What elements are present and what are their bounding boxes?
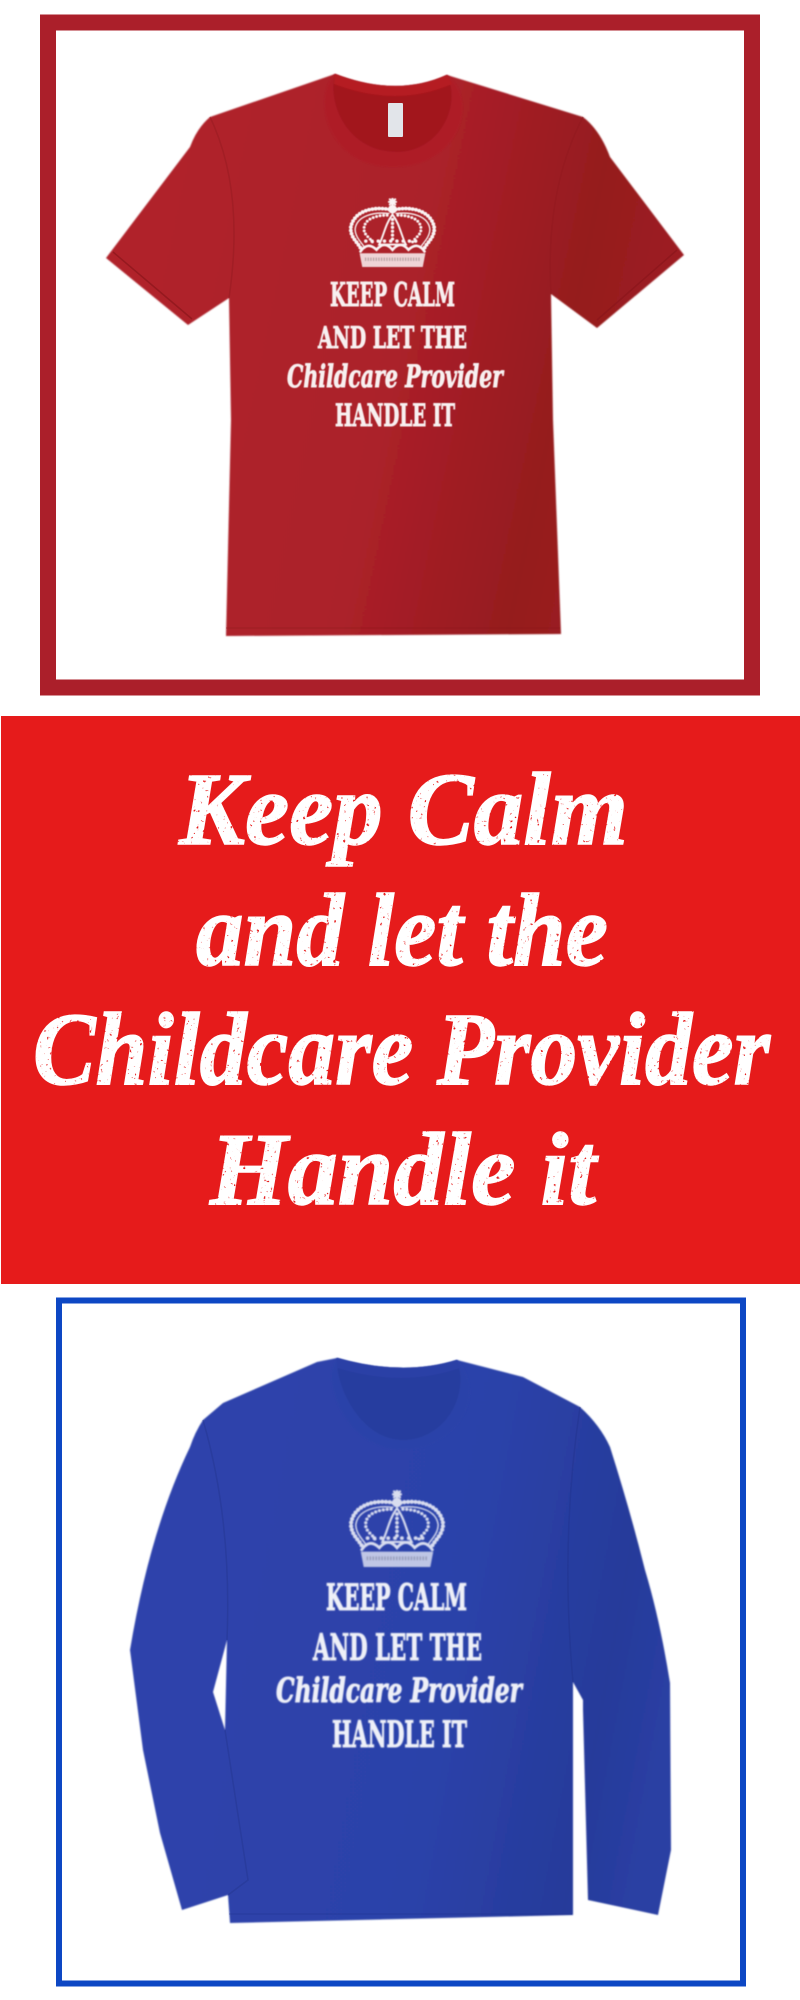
shirt slogan: blue: KEEP CALM (326, 1577, 467, 1619)
shirt slogan: red: AND LET THE (317, 321, 467, 356)
illustration: blue long-sleeve shirt (130, 1358, 671, 1923)
shirt slogan: red: KEEP CALM (330, 275, 455, 314)
shirt slogan: blue (276, 1577, 523, 1756)
shirt slogan: red: Childcare Provider (287, 359, 505, 395)
neck opening and collar (325, 74, 463, 167)
crown graphic on blue shirt (351, 1490, 443, 1567)
panel: blue long-sleeve product frame (59, 1300, 743, 1984)
neck label tag (388, 103, 403, 137)
shirt slogan: blue: Childcare Provider (276, 1671, 523, 1711)
underarm gap (213, 1640, 227, 1730)
shirt slogan: red (287, 275, 505, 434)
crown graphic on red shirt (351, 198, 434, 267)
panel: red t-shirt product frame (48, 22, 752, 688)
shirt slogan: blue: AND LET THE (312, 1627, 482, 1669)
shirt slogan: blue: HANDLE IT (332, 1714, 467, 1756)
banner: red slogan panel (1, 716, 800, 1284)
banner headline: and let the (196, 873, 608, 988)
banner headline: Keep Calm (178, 752, 628, 867)
shirt slogan: red: HANDLE IT (335, 398, 455, 434)
banner headline (33, 752, 771, 1227)
illustration: red t-shirt (106, 74, 684, 636)
banner headline: Handle it (209, 1112, 599, 1227)
neck collar (332, 1358, 470, 1450)
